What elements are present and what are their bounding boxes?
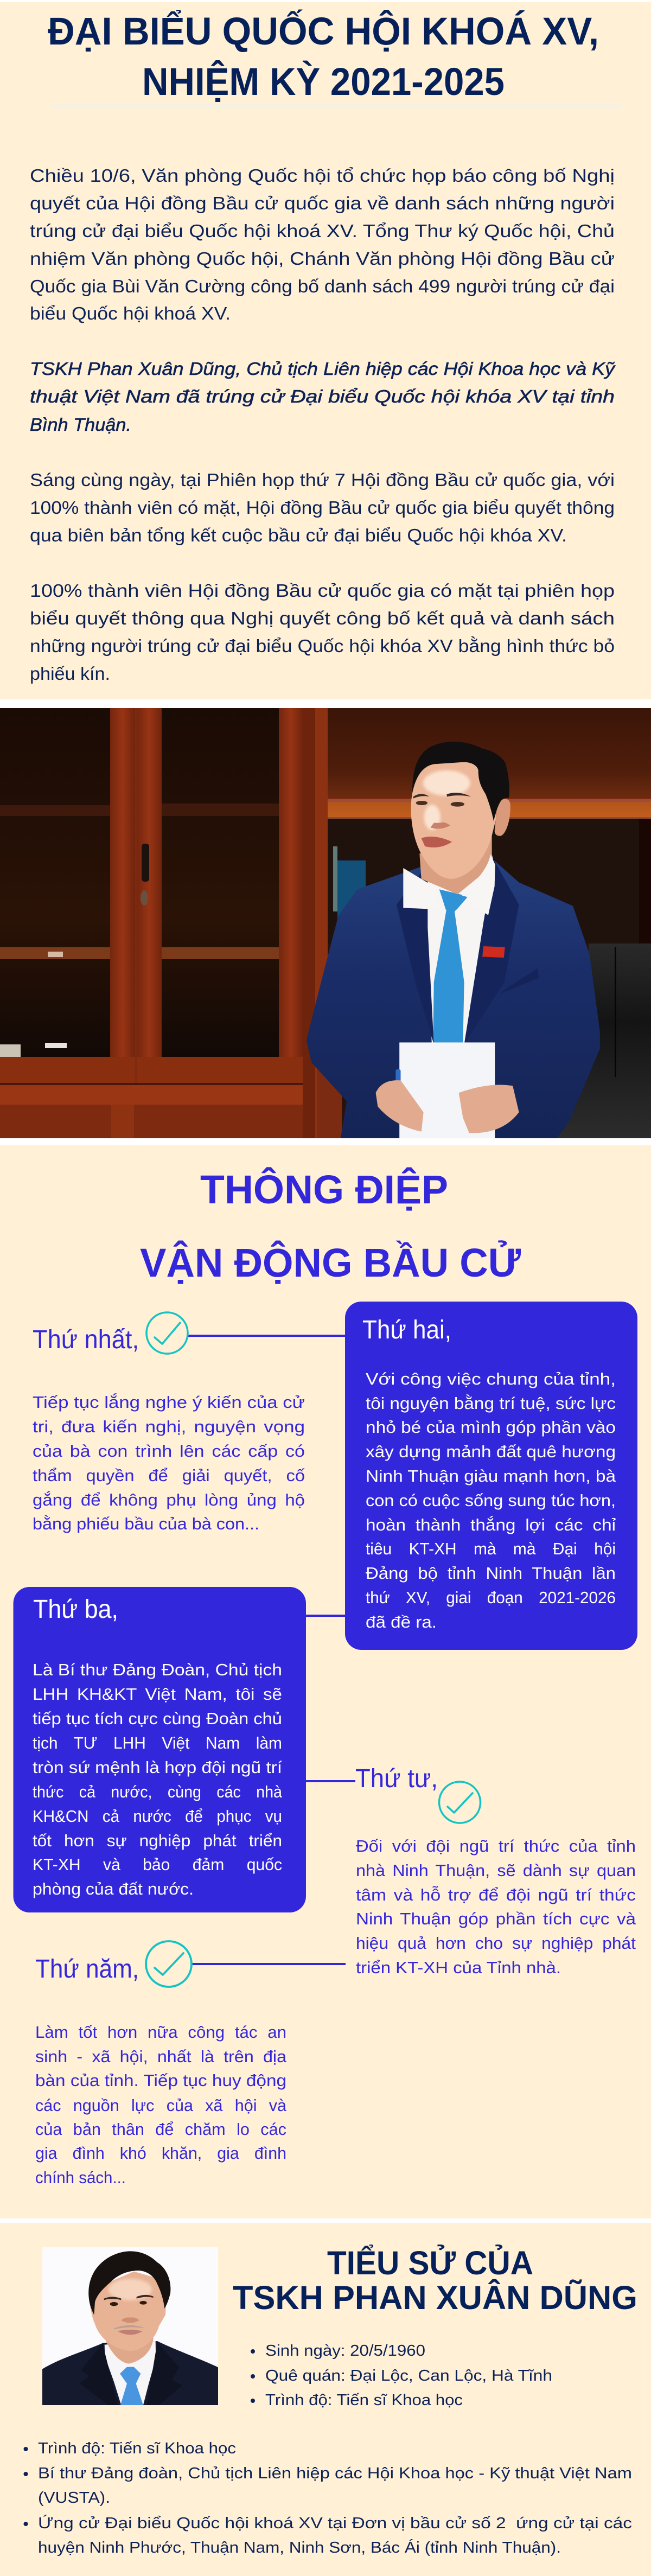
text block: paragraph 1: trúng cử đại biểu Quốc hội khoá XV. Tổng Thư ký Quốc hội, Chủ: [30, 221, 615, 241]
card: third message: [13, 1587, 306, 1912]
item: fifth message: Thứ năm,: [35, 1955, 139, 1984]
item: fourth message: Đối với đội ngũ trí thức của tỉnh: [356, 1837, 636, 1856]
card: third message: phòng của đất nước.: [33, 1879, 194, 1898]
text block: paragraph 4: 100% thành viên Hội đồng Bầu cử quốc gia có mặt tại phiên họp: [30, 581, 615, 601]
card: second message: tôi nguyện bằng trí tuệ, sức lực: [366, 1394, 616, 1413]
text block: paragraph 1: Quốc gia Bùi Văn Cường công bố danh sách 499 người trúng cử đại: [30, 276, 615, 296]
list: personal details: Trình độ: Tiến sĩ Khoa học: [265, 2392, 463, 2409]
item: first message: thẩm quyền để giải quyết, cố: [33, 1466, 305, 1485]
title: ĐẠI BIỂU QUỐC HỘI KHOÁ XV,: [48, 10, 599, 53]
item: fourth message: [355, 1764, 636, 1977]
text block: paragraph 4: những người trúng cử đại biểu Quốc hội khóa XV bằng hình thức bỏ: [30, 636, 615, 656]
title: NHIỆM KỲ 2021-2025: [142, 60, 505, 104]
photo: portrait: [42, 2247, 218, 2405]
text block: paragraph 3: 100% thành viên có mặt, Hội đồng Bầu cử quốc gia biểu quyết thông: [30, 498, 615, 518]
card: second message: Đảng bộ tỉnh Ninh Thuận lần: [366, 1564, 616, 1583]
item: fifth message: [35, 1941, 287, 2187]
item: first message: Tiếp tục lắng nghe ý kiến của cử: [33, 1393, 305, 1412]
item: first message: gắng để không phụ lòng ủng hộ: [33, 1490, 305, 1509]
list: career details: [24, 2440, 632, 2556]
text block: paragraph 1: Chiều 10/6, Văn phòng Quốc hội tổ chức họp báo công bố Nghị: [30, 165, 615, 186]
cabinet glass doors: [0, 708, 328, 1138]
icon: check circle: [146, 1312, 188, 1354]
card: third message: Là Bí thư Đảng Đoàn, Chủ tịch: [33, 1660, 282, 1679]
heading: biography: TSKH PHAN XUÂN DŨNG: [233, 2279, 637, 2316]
item: first message: [33, 1312, 305, 1533]
card: second message: con có cuộc sống sung túc hơn,: [366, 1491, 616, 1510]
text block: paragraph 4: [30, 581, 615, 684]
card: third message: thức cả nước, cùng các nhà: [33, 1782, 283, 1801]
card: third message: KH&CN cả nước để phục vụ: [33, 1807, 282, 1826]
man body: [307, 855, 600, 1139]
item: fourth message: Ninh Thuận góp phần tích cực và: [356, 1909, 636, 1928]
text block: paragraph 2: [30, 359, 616, 435]
item: fourth message: hiệu quả hơn cho sự nghiệp phát: [356, 1934, 636, 1953]
item: fourth message: nhà Ninh Thuận, sẽ dành sự quan: [356, 1861, 636, 1880]
text block: paragraph 3: qua biên bản tổng kết cuộc bầu cử đại biểu Quốc hội khóa XV.: [30, 525, 567, 545]
text block: paragraph 3: [30, 470, 615, 545]
item: fifth message: chính sách...: [35, 2168, 126, 2187]
card: second message: Thứ hai,: [362, 1316, 451, 1344]
card: third message: KT-XH và bảo đảm quốc: [33, 1855, 282, 1874]
item: fifth message: sinh - xã hội, nhất là trên địa: [35, 2047, 287, 2066]
card: second message: Với công việc chung của tỉnh,: [366, 1369, 616, 1388]
card: second message: [345, 1302, 637, 1650]
card: second message: nhỏ bé của mình góp phần vào: [366, 1418, 616, 1437]
text block: paragraph 1: nhiệm Văn phòng Quốc hội, Chánh Văn phòng Hội đồng Bầu cử: [30, 248, 615, 269]
list: career details: Ứng cử Đại biểu Quốc hội khoá XV tại Đơn vị bầu cử số 2 ứng cử tại các: [38, 2514, 632, 2532]
card: second message: Ninh Thuận giàu mạnh hơn, bà: [366, 1466, 616, 1485]
heading: biography: [233, 2245, 637, 2316]
panel: biography: [0, 2223, 651, 2576]
list: personal details: Sinh ngày: 20/5/1960: [265, 2342, 425, 2360]
card: third message: tròn sứ mệnh là hợp đội ngũ trí: [33, 1758, 282, 1777]
card: second message: hoàn thành thắng lợi các chỉ: [366, 1515, 616, 1534]
list: career details: huyện Ninh Phước, Thuận Nam, Ninh Sơn, Bác Ái (tỉnh Ninh Thuận).: [38, 2539, 561, 2556]
item: fifth message: gia đình khó khăn, gia đình: [35, 2144, 286, 2163]
item: fourth message: tâm và hỗ trợ để đội ngũ trí thức: [356, 1885, 636, 1904]
text block: paragraph 1: [30, 165, 615, 323]
text block: paragraph 4: phiếu kín.: [30, 664, 110, 684]
card: third message: tịch TƯ LHH Việt Nam làm: [33, 1733, 282, 1752]
card: third message: tốt hơn sự nghiệp phát triển: [33, 1831, 282, 1850]
card: third message: tiếp tục tích cực cùng Đoàn chủ: [33, 1709, 282, 1728]
photo: delegate standing in office: [0, 708, 651, 1139]
list: career details: Bí thư Đảng đoàn, Chủ tịch Liên hiệp các Hội Khoa học - Kỹ thuật Việt Nam: [38, 2465, 632, 2482]
heading: campaign message: VẬN ĐỘNG BẦU CỬ: [140, 1240, 521, 1285]
title: [48, 10, 599, 104]
connector lines: [188, 1335, 355, 1965]
item: first message: bằng phiếu bầu của bà con...: [33, 1514, 259, 1533]
item: fifth message: các nguồn lực của xã hội và: [35, 2096, 287, 2115]
item: fourth message: triển KT-XH của Tỉnh nhà.: [356, 1958, 561, 1977]
item: fourth message: Thứ tư,: [355, 1764, 438, 1793]
heading: campaign message: THÔNG ĐIỆP: [200, 1167, 448, 1212]
panel: introduction: [0, 2, 651, 699]
text block: paragraph 3: Sáng cùng ngày, tại Phiên họp thứ 7 Hội đồng Bầu cử quốc gia, với: [30, 470, 615, 490]
text block: paragraph 1: quyết của Hội đồng Bầu cử quốc gia về danh sách những người: [30, 193, 615, 213]
card: second message: thứ XV, giai đoạn 2021-2026: [366, 1588, 616, 1607]
card: third message: Thứ ba,: [33, 1595, 118, 1624]
item: first message: tri, đưa kiến nghị, nguyện vọng: [33, 1417, 305, 1436]
card: second message: đã đề ra.: [366, 1612, 437, 1631]
card: second message: tiêu KT-XH mà mà Đại hội: [366, 1539, 616, 1558]
list: career details: (VUSTA).: [38, 2489, 110, 2507]
heading: biography: TIỂU SỬ CỦA: [327, 2245, 533, 2281]
panel: campaign message: [0, 1145, 651, 2218]
item: first message: Thứ nhất,: [33, 1325, 139, 1354]
heading: campaign message: [140, 1167, 521, 1285]
list: personal details: Quê quán: Đại Lộc, Can Lộc, Hà Tĩnh: [265, 2367, 552, 2384]
icon: check circle: [439, 1782, 481, 1823]
text block: paragraph 4: biểu quyết thông qua Nghị quyết công bố kết quả và danh sách: [30, 608, 615, 628]
card: second message: xây dựng mảnh đất quê hương: [366, 1442, 616, 1461]
text block: paragraph 2: TSKH Phan Xuân Dũng, Chủ tịch Liên hiệp các Hội Khoa học và Kỹ: [30, 359, 616, 379]
card: third message: LHH KH&KT Việt Nam, tôi sẽ: [33, 1685, 282, 1704]
item: fifth message: của bản thân để chăm lo các: [35, 2120, 286, 2139]
item: fifth message: Làm tốt hơn nữa công tác an: [35, 2023, 286, 2042]
list: career details: Trình độ: Tiến sĩ Khoa học: [38, 2440, 236, 2457]
list: personal details: [251, 2342, 552, 2409]
chair: [553, 943, 651, 1138]
text block: paragraph 2: thuật Việt Nam đã trúng cử Đại biểu Quốc hội khóa XV tại tỉnh: [30, 386, 615, 406]
text block: paragraph 2: Bình Thuận.: [30, 415, 131, 435]
icon: check circle: [146, 1941, 192, 1987]
item: first message: của bà con trình lên các cấp có: [33, 1442, 305, 1461]
upper right shelf: [317, 708, 651, 1138]
item: fifth message: bàn của tỉnh. Tiếp tục huy động: [35, 2071, 286, 2090]
text block: paragraph 1: biểu Quốc hội khoá XV.: [30, 303, 231, 323]
man head: [403, 742, 510, 915]
